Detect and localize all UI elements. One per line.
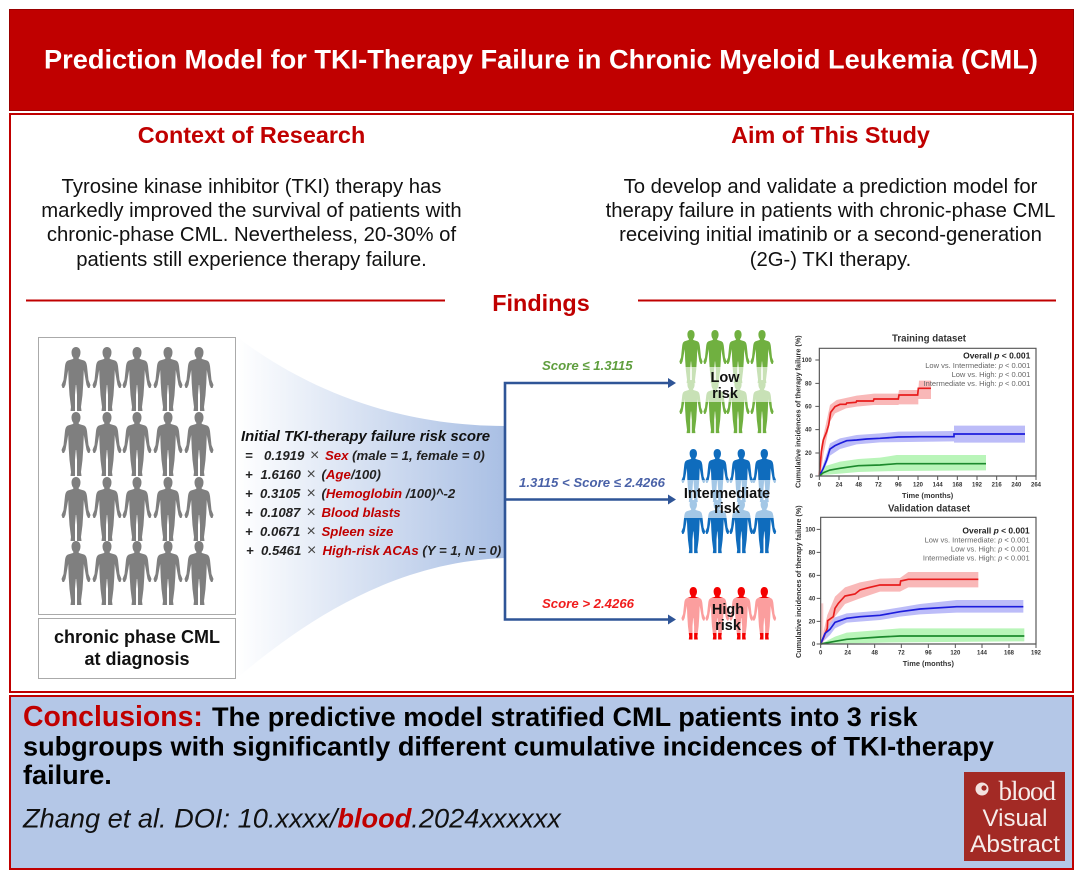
chart: validation dataset: 48	[871, 650, 879, 656]
chart: training dataset: 100	[802, 358, 812, 364]
chart: validation dataset: Overall p < 0.001	[962, 525, 1030, 535]
chart: training dataset: 120	[913, 482, 924, 488]
risk score formula: 0.0671	[260, 524, 300, 539]
chart: training dataset: 60	[805, 404, 812, 410]
chart: validation dataset: 144	[977, 650, 988, 656]
chart: training dataset: 96	[895, 482, 902, 488]
text: aim body: To develop and validate a prediction model for	[624, 176, 1038, 198]
text: context body: markedly improved the survival of patients with	[41, 200, 462, 222]
risk score formula: Initial TKI-therapy failure risk score	[241, 429, 490, 445]
risk score formula: +	[245, 505, 253, 520]
chart: validation dataset: Validation dataset	[888, 504, 971, 515]
chart: validation dataset: 0	[819, 650, 823, 656]
title banner	[10, 10, 1074, 110]
label: intermediate score threshold: 1.3115 < Score ≤ 2.4266	[519, 475, 666, 490]
risk score formula	[241, 429, 501, 559]
text: context body: patients still experience therapy failure.	[76, 249, 427, 271]
chart: validation dataset: 80	[809, 550, 816, 556]
risk score formula: +	[245, 524, 253, 539]
risk score formula: (Y = 1, N = 0)	[422, 543, 501, 558]
chart: validation dataset	[794, 504, 1042, 668]
icon: grey patient figures	[62, 347, 214, 605]
chart: training dataset: 24	[836, 482, 843, 488]
chart: training dataset: 80	[805, 381, 812, 387]
chart: training dataset: Cumulative incidences of therapy failure (%)	[794, 335, 803, 488]
text: conclusions: subgroups with significantly different cumulative incidences of TKI-therapy	[23, 730, 994, 762]
chart: validation dataset: 20	[809, 619, 816, 625]
chart: training dataset: Low vs. Intermediate: p < 0.001	[925, 361, 1030, 370]
risk score formula: ×	[306, 504, 316, 521]
icon: low risk group: Low	[710, 370, 740, 386]
chronic phase label box: chronic phase CML	[54, 627, 220, 647]
risk score formula: Age/100)	[326, 467, 381, 482]
chart: validation dataset: 40	[809, 596, 816, 602]
chronic phase label box	[38, 618, 236, 678]
panel: context of research	[41, 122, 462, 271]
risk score formula: 0.3105	[260, 486, 300, 501]
risk score formula: (	[322, 486, 328, 501]
patient population box	[38, 338, 236, 614]
icon: high risk group: risk	[715, 618, 742, 634]
citation: Zhang et al. DOI: 10.xxxx/blood.2024xxxxxx	[22, 802, 562, 834]
chart: training dataset: Low vs. High: p < 0.001	[952, 370, 1030, 379]
chart: training dataset: 0	[818, 482, 822, 488]
chart: training dataset: Time (months)	[902, 491, 954, 500]
logo: blood visual abstract	[964, 772, 1065, 861]
icon: low risk group: risk	[712, 386, 739, 402]
risk score formula: Spleen size	[322, 524, 393, 539]
heading: findings: Findings	[492, 290, 590, 316]
chart: training dataset: 0	[810, 474, 814, 480]
risk score formula: Blood blasts	[322, 505, 401, 520]
risk score formula: ×	[307, 542, 316, 559]
chart: training dataset: 48	[855, 482, 863, 488]
chart: validation dataset: 100	[805, 527, 816, 533]
label: high score threshold: Score > 2.4266	[542, 596, 635, 611]
chart: validation dataset: Time (months)	[903, 659, 954, 668]
logo: blood visual abstract: Visual	[983, 805, 1047, 832]
risk score formula: 0.1087	[260, 505, 300, 520]
chart: validation dataset: 24	[844, 650, 852, 656]
text: context body: chronic-phase CML. Nevertheless, 20-30% of	[47, 224, 456, 246]
icon: high risk group	[678, 587, 780, 639]
risk score formula: (	[322, 467, 328, 482]
chart: training dataset: 264	[1031, 482, 1042, 488]
arrows: stratification connector	[505, 378, 676, 624]
chart: training dataset: Intermediate vs. High: p < 0.001	[924, 379, 1030, 388]
chart: training dataset: 20	[805, 451, 812, 457]
logo: blood visual abstract: blood	[998, 776, 1056, 806]
chart: validation dataset: 96	[925, 650, 932, 656]
text: aim body: therapy failure in patients with chronic-phase CML	[606, 200, 1055, 222]
risk score formula: 0.5461	[261, 543, 301, 558]
risk score formula: ×	[306, 485, 316, 502]
chart: training dataset: 192	[972, 482, 983, 488]
chart: validation dataset: 192	[1031, 650, 1042, 656]
heading: aim: Aim of This Study	[731, 122, 930, 148]
risk score formula: +	[245, 486, 253, 501]
chart: training dataset: Overall p < 0.001	[963, 351, 1031, 361]
risk score formula: ×	[310, 447, 319, 464]
risk score formula: High-risk ACAs	[322, 543, 419, 558]
text: conclusions: Conclusions:	[23, 701, 203, 733]
chart: training dataset: 72	[875, 482, 882, 488]
risk score formula: Hemoglobin /100)^-2	[326, 486, 455, 501]
title: Prediction Model for TKI-Therapy Failure in Chronic Myeloid Leukemia (CML)	[44, 44, 1038, 74]
heading: context: Context of Research	[138, 122, 365, 148]
risk score formula: ×	[306, 466, 316, 483]
chart: validation dataset: 120	[950, 650, 961, 656]
risk score formula: Sex	[325, 448, 349, 463]
chart: training dataset: 168	[952, 482, 963, 488]
chart: training dataset: 240	[1011, 482, 1022, 488]
icon: intermediate risk group	[678, 449, 780, 553]
chronic phase label box: at diagnosis	[84, 649, 190, 669]
chart: validation dataset: 168	[1004, 650, 1015, 656]
text: aim body: receiving initial imatinib or a second-generation	[619, 224, 1042, 246]
risk score formula: 1.6160	[260, 467, 301, 482]
chart: training dataset	[794, 334, 1042, 500]
chart: training dataset: 40	[805, 428, 812, 434]
risk score formula: ×	[306, 523, 316, 540]
icon: low risk group	[676, 330, 778, 433]
chart: training dataset: Training dataset	[892, 334, 967, 345]
icon: intermediate risk group: risk	[714, 501, 741, 517]
chart: training dataset: 216	[992, 482, 1002, 488]
chart: validation dataset: 0	[812, 642, 816, 648]
label: low score threshold: Score ≤ 1.3115	[542, 358, 633, 373]
chart: validation dataset: Cumulative incidences of therapy failure (%)	[794, 505, 803, 658]
text: aim body: (2G-) TKI therapy.	[750, 249, 911, 271]
funnel	[237, 337, 505, 678]
risk score formula: +	[245, 467, 253, 482]
risk score formula: +	[246, 543, 254, 558]
text: context body	[41, 176, 462, 271]
chart: validation dataset: Low vs. Intermediate: p < 0.001	[925, 535, 1030, 544]
text: conclusions: failure.	[23, 759, 112, 790]
text: conclusions: The predictive model stratified CML patients into 3 risk	[212, 701, 919, 732]
chart: validation dataset: 72	[898, 650, 905, 656]
text: conclusions	[23, 701, 994, 790]
panel: aim of this study	[606, 122, 1055, 271]
chart: training dataset: 144	[933, 482, 943, 488]
icon: high risk group: High	[712, 602, 744, 618]
risk score formula: (male = 1, female = 0)	[352, 448, 485, 463]
text: aim body	[606, 176, 1055, 271]
risk score formula: 0.1919	[264, 448, 304, 463]
risk score formula: =	[245, 448, 253, 463]
chart: validation dataset: Low vs. High: p < 0.001	[951, 544, 1030, 553]
panel: conclusions	[10, 696, 1073, 869]
chart: validation dataset: 60	[809, 573, 816, 579]
text: context body: Tyrosine kinase inhibitor (TKI) therapy has	[62, 176, 441, 198]
icon: intermediate risk group: Intermediate	[684, 486, 770, 502]
chart: validation dataset: Intermediate vs. High: p < 0.001	[923, 553, 1030, 562]
logo: blood visual abstract: Abstract	[970, 831, 1060, 858]
main panel	[10, 114, 1073, 692]
